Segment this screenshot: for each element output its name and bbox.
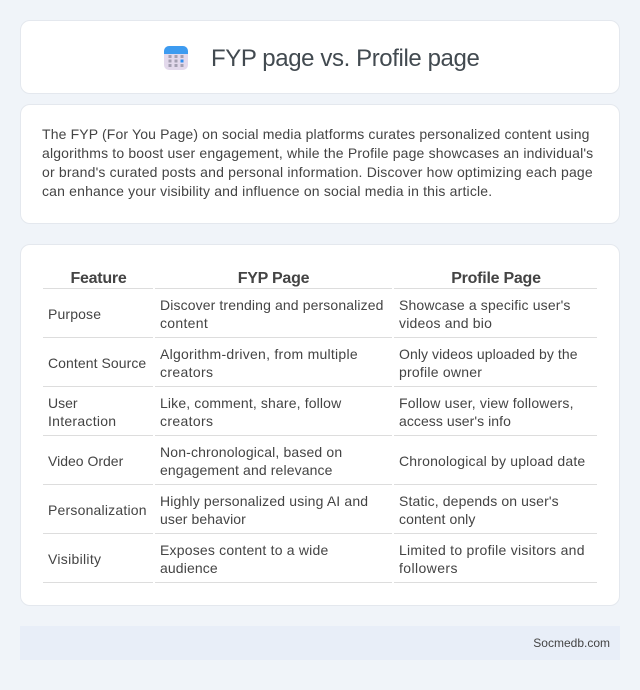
row: Visibility bbox=[48, 542, 585, 576]
row: Personalization: content only bbox=[399, 511, 475, 527]
intro paragraph: or brand's curated posts and personal information. Discover how optimizing each page bbox=[42, 164, 593, 180]
row: Purpose: Discover trending and personalized bbox=[160, 297, 384, 313]
row: Video Order: Chronological by upload date bbox=[399, 453, 585, 469]
row: Video Order: Video Order bbox=[48, 453, 123, 469]
row: Personalization: user behavior bbox=[160, 511, 246, 527]
row: Purpose: videos and bio bbox=[399, 315, 492, 331]
row: Visibility: audience bbox=[160, 560, 218, 576]
row: Content Source bbox=[48, 346, 578, 380]
row: Content Source: Content Source bbox=[48, 355, 146, 371]
intro paragraph: algorithms to boost user engagement, while the Profile page showcases an individual's bbox=[42, 145, 593, 161]
row: User Interaction bbox=[48, 395, 574, 429]
row: Content Source: creators bbox=[160, 364, 213, 380]
row: User Interaction: access user's info bbox=[399, 413, 511, 429]
row: Video Order bbox=[48, 444, 585, 478]
footer bar bbox=[20, 626, 620, 660]
panel: comparison table bbox=[20, 244, 620, 606]
intro paragraph: The FYP (For You Page) on social media platforms curates personalized content using bbox=[42, 126, 590, 142]
icon: calendar bbox=[164, 46, 188, 70]
panel: intro text bbox=[20, 104, 620, 224]
row: Video Order: Non-chronological, based on bbox=[160, 444, 342, 460]
table header: FYP Page bbox=[238, 270, 309, 287]
row: Visibility: followers bbox=[399, 560, 458, 576]
row: User Interaction: Interaction bbox=[48, 413, 116, 429]
row: Personalization: Personalization bbox=[48, 502, 147, 518]
row: Content Source: Algorithm-driven, from multiple bbox=[160, 346, 358, 362]
panel: title card bbox=[20, 20, 620, 94]
row: Purpose bbox=[48, 297, 571, 331]
row: Personalization bbox=[48, 493, 559, 527]
row: Visibility: Exposes content to a wide bbox=[160, 542, 328, 558]
row: Purpose: content bbox=[160, 315, 208, 331]
row: User Interaction: creators bbox=[160, 413, 213, 429]
table header: Profile Page bbox=[451, 270, 541, 287]
row: Content Source: profile owner bbox=[399, 364, 482, 380]
table header bbox=[70, 270, 541, 287]
intro paragraph bbox=[42, 126, 593, 199]
row: Content Source: Only videos uploaded by the bbox=[399, 346, 578, 362]
row: Video Order: engagement and relevance bbox=[160, 462, 333, 478]
row: Personalization: Static, depends on user's bbox=[399, 493, 559, 509]
table header: Feature bbox=[70, 270, 127, 287]
title: FYP page vs. Profile page bbox=[211, 45, 479, 72]
row: Personalization: Highly personalized using AI and bbox=[160, 493, 368, 509]
intro paragraph: can enhance your visibility and influence on social media in this article. bbox=[42, 183, 492, 199]
row: Visibility: Visibility bbox=[48, 551, 101, 567]
row: User Interaction: Follow user, view followers, bbox=[399, 395, 574, 411]
row: User Interaction: User bbox=[48, 395, 78, 411]
row: User Interaction: Like, comment, share, follow bbox=[160, 395, 341, 411]
row: Purpose: Showcase a specific user's bbox=[399, 297, 571, 313]
row: Visibility: Limited to profile visitors and bbox=[399, 542, 585, 558]
row: Purpose: Purpose bbox=[48, 306, 101, 322]
footer credit: Socmedb.com bbox=[533, 636, 610, 650]
